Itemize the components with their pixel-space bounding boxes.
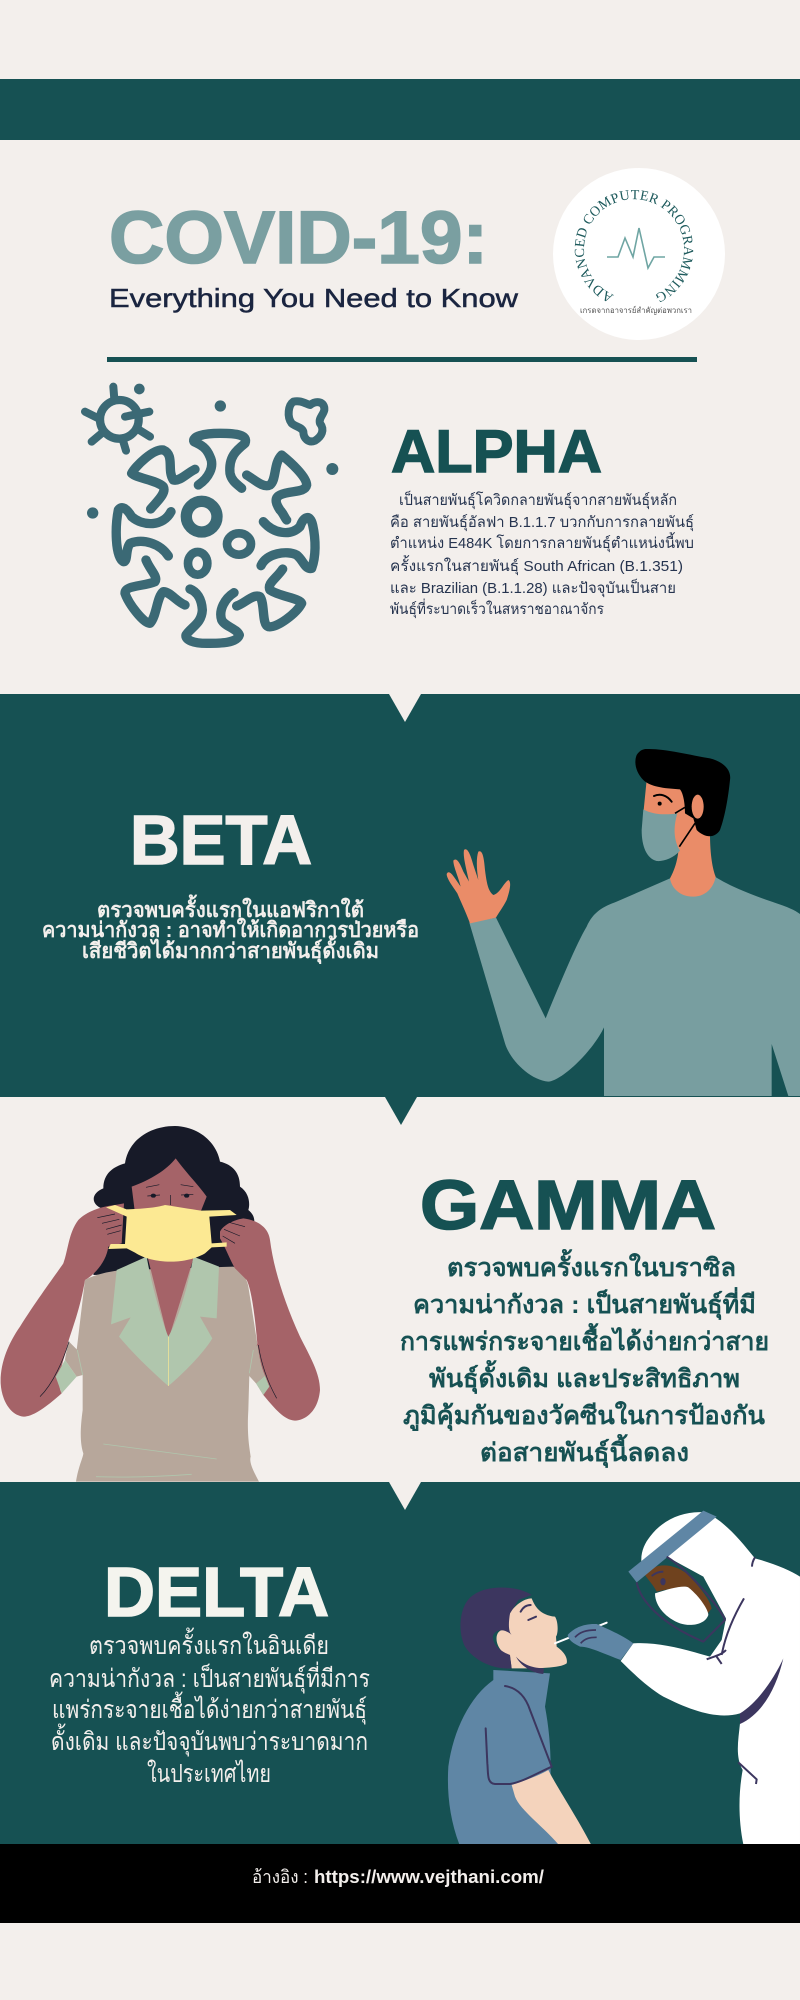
text block: beta: ความน่ากังวล : อาจทำให้เกิดอาการป่วยหรือ <box>42 917 419 942</box>
heading: gamma: GAMMA <box>420 1166 716 1244</box>
text block: alpha: เป็นสายพันธุ์โควิดกลายพันธุ์จากสายพันธุ์หลัก <box>399 490 677 510</box>
text block: alpha: ครั้งแรกในสายพันธุ์ South African (B.1.351) <box>390 555 683 576</box>
heading: delta: DELTA <box>104 1553 329 1631</box>
text block: alpha: พันธุ์ที่ระบาดเร็วในสหราชอาณาจักร <box>390 598 604 619</box>
logo badge: เกรดจากอาจารย์สำคัญต่อพวกเรา <box>580 305 692 315</box>
text block: gamma: ตรวจพบครั้งแรกในบราซิล <box>447 1248 736 1282</box>
text block: delta: แพร่กระจายเชื้อได้ง่ายกว่าสายพันธุ์ <box>52 1691 367 1725</box>
panel: delta <box>0 1482 800 1844</box>
text block: delta: ความน่ากังวล : เป็นสายพันธุ์ที่มีการ <box>49 1661 370 1694</box>
text block: gamma: ภูมิคุ้มกันของวัคซีนในการป้องกัน <box>403 1400 765 1432</box>
text block: delta: ดั้งเดิม และปัจจุบันพบว่าระบาดมาก <box>51 1723 368 1757</box>
text block: beta <box>42 894 419 965</box>
illustration: woman putting on mask <box>1 1126 320 1482</box>
subtitle: Everything You Need to Know <box>109 283 518 313</box>
footer band <box>0 1844 800 1923</box>
illustration: swab test <box>448 1511 800 1844</box>
text block: delta: ในประเทศไทย <box>147 1759 271 1788</box>
text block: alpha: คือ สายพันธุ์อัลฟา B.1.1.7 บวกกับการกลายพันธุ์ <box>390 514 694 532</box>
text block: gamma: พันธุ์ดั้งเดิม และประสิทธิภาพ <box>429 1359 740 1395</box>
text block: alpha: และ Brazilian (B.1.1.28) และปัจจุบันเป็นสาย <box>390 578 676 598</box>
illustration: man waving with mask <box>447 749 800 1096</box>
heading: beta: BETA <box>130 801 312 879</box>
title: COVID-19: <box>109 196 488 279</box>
text block: delta: ตรวจพบครั้งแรกในอินเดีย <box>89 1627 329 1660</box>
reference url: https://www.vejthani.com/ <box>314 1867 544 1887</box>
text block: beta: เสียชีวิตได้มากกว่าสายพันธุ์ดั้งเดิม <box>82 935 379 965</box>
panel: alpha <box>390 418 694 619</box>
top band <box>0 79 800 140</box>
text block: gamma: ต่อสายพันธุ์นี้ลดลง <box>480 1433 689 1469</box>
text block: alpha <box>390 490 694 619</box>
logo badge: ADVANCED COMPUTER PROGRAMMING <box>574 190 694 302</box>
text block: beta: ตรวจพบครั้งแรกในแอฟริกาใต้ <box>97 894 364 922</box>
text block: delta <box>49 1627 370 1788</box>
text block: gamma <box>400 1248 769 1469</box>
heading: alpha: ALPHA <box>391 418 602 485</box>
notch: beta pointer <box>385 1097 417 1125</box>
text block: gamma: ความน่ากังวล : เป็นสายพันธุ์ที่มี <box>413 1287 756 1321</box>
panel: beta <box>0 694 800 1097</box>
logo badge <box>553 168 725 340</box>
text block: gamma: การแพร่กระจายเชื้อได้ง่ายกว่าสาย <box>400 1322 769 1356</box>
icon: virus <box>85 384 338 643</box>
text block: alpha: ตำแหน่ง E484K โดยการกลายพันธุ์ตำแหน่งนี้พบ <box>390 532 694 553</box>
panel: gamma <box>400 1166 769 1469</box>
reference label: อ้างอิง : <box>252 1867 308 1887</box>
